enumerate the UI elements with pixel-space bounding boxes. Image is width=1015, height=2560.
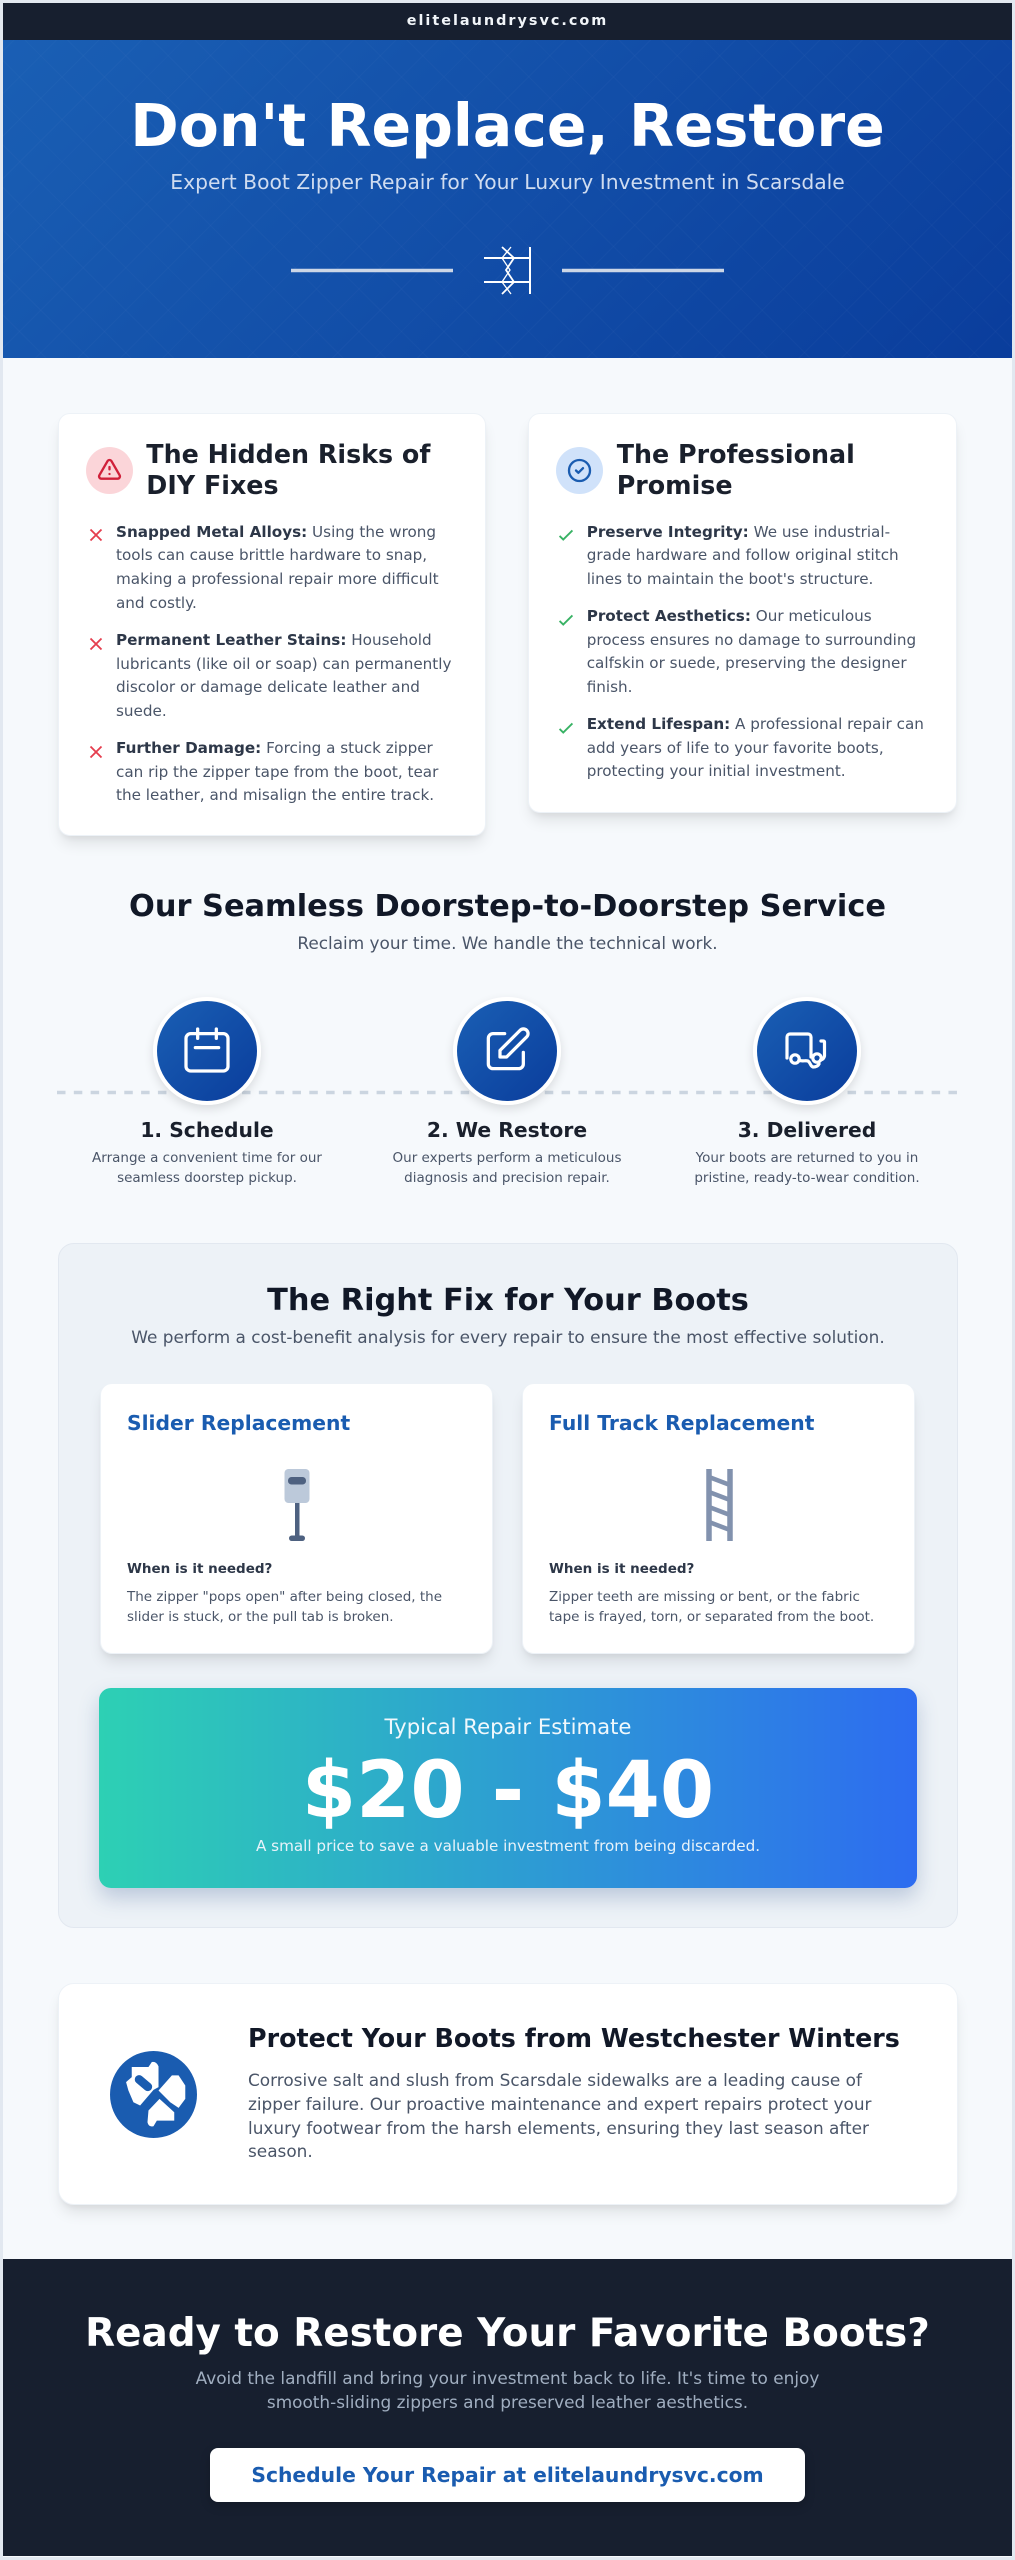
- when needed description: tape is frayed, torn, or separated from the boot.: [549, 1608, 874, 1624]
- risk text: can rip the zipper tape from the boot, tear: [116, 763, 438, 781]
- benefit text: add years of life to your favorite boots,: [587, 739, 884, 757]
- main title: Don't Replace, Restore: [130, 92, 885, 160]
- panel: the right fix for your boots: [58, 1243, 958, 1928]
- benefit text: process ensures no damage to surrounding: [587, 631, 916, 649]
- step icon: truck: [753, 997, 861, 1105]
- step description: Our experts perform a meticulous: [393, 1150, 621, 1166]
- when needed description: slider is stuck, or the pull tab is broken.: [127, 1608, 394, 1624]
- step icon: edit: [453, 997, 561, 1105]
- step title: 1. Schedule: [140, 1118, 274, 1142]
- step title: 3. Delivered: [738, 1118, 876, 1142]
- panel: the professional promise: [528, 413, 957, 813]
- benefit text: Preserve Integrity: We use industrial-: [587, 523, 890, 541]
- card title: Full Track Replacement: [549, 1411, 814, 1435]
- risk text: Further Damage: Forcing a stuck zipper: [116, 739, 433, 757]
- icon: zipper track: [706, 1469, 733, 1541]
- risk text: [116, 631, 451, 720]
- process dashed connector: [57, 1090, 957, 1094]
- heading: The Professional: [617, 439, 855, 469]
- section subtitle: We perform a cost-benefit analysis for every repair to ensure the most effective solution.: [131, 1327, 885, 1347]
- step description: Arrange a convenient time for our: [92, 1150, 322, 1166]
- risk: snapped metal alloys: [90, 523, 439, 612]
- step description: pristine, ready-to-wear condition.: [694, 1170, 920, 1186]
- when needed description: [126, 1588, 442, 1624]
- benefit text: [587, 715, 924, 780]
- risk text: Permanent Leather Stains: Household: [116, 631, 432, 649]
- benefit text: [587, 607, 916, 696]
- icon: check: [559, 614, 573, 626]
- footer heading: Ready to Restore Your Favorite Boots?: [85, 2310, 930, 2356]
- risk text: making a professional repair more difficult: [116, 570, 439, 588]
- icon: zipper slider: [284, 1469, 310, 1541]
- step description: seamless doorstep pickup.: [117, 1170, 297, 1186]
- footer text: Avoid the landfill and bring your investment back to life. It's time to enjoy: [196, 2368, 819, 2388]
- benefit text: calfskin or suede, preserving the designer: [587, 654, 907, 672]
- step description: [694, 1150, 920, 1186]
- footer text: smooth-sliding zippers and preserved leather aesthetics.: [267, 2392, 748, 2412]
- button: [210, 2448, 805, 2502]
- when needed label: When is it needed?: [549, 1560, 694, 1576]
- risk: permanent leather stains: [90, 631, 451, 720]
- step description: diagnosis and precision repair.: [404, 1170, 610, 1186]
- step description: [393, 1150, 621, 1186]
- benefit: protect aesthetics: [559, 607, 916, 696]
- step title: 2. We Restore: [427, 1118, 587, 1142]
- when needed label: When is it needed?: [127, 1560, 272, 1576]
- when needed description: [549, 1588, 874, 1624]
- zipper divider icon: [291, 246, 724, 295]
- heading: Protect Your Boots from Westchester Winters: [248, 2023, 900, 2053]
- top bar: [3, 3, 1012, 40]
- price: $20 - $40: [302, 1746, 714, 1836]
- benefit text: Extend Lifespan: A professional repair can: [587, 715, 924, 733]
- icon: check: [559, 722, 573, 734]
- heading: [616, 439, 855, 500]
- step description: Your boots are returned to you in: [696, 1150, 918, 1166]
- section subtitle: doorstep service: Reclaim your time. We handle the technical work.: [297, 933, 718, 953]
- benefit text: [587, 523, 899, 588]
- subtitle: Expert Boot Zipper Repair for Your Luxury Investment in Scarsdale: [170, 170, 845, 194]
- benefit text: finish.: [587, 678, 632, 696]
- body text: zipper failure. Our proactive maintenance and expert repairs protect your: [248, 2094, 872, 2114]
- body text: season.: [248, 2141, 313, 2161]
- estimate note: A small price to save a valuable investment from being discarded.: [256, 1837, 760, 1855]
- footer call to action: [3, 2259, 1012, 2556]
- risk text: [116, 739, 438, 804]
- step 1: schedule: [92, 997, 322, 1186]
- website name: elitelaundrysvc.com: [407, 13, 608, 29]
- panel: the hidden risks of DIY fixes: [58, 413, 486, 836]
- when needed description: Zipper teeth are missing or bent, or the fabric: [549, 1588, 860, 1604]
- button label: Schedule Your Repair at elitelaundrysvc.com: [251, 2463, 764, 2487]
- step 2: we restore: [393, 997, 621, 1186]
- body text: [248, 2070, 872, 2161]
- heading: Promise: [617, 470, 733, 500]
- risk text: suede.: [116, 702, 167, 720]
- benefit text: Protect Aesthetics: Our meticulous: [587, 607, 872, 625]
- when needed description: The zipper "pops open" after being closed, the: [127, 1588, 442, 1604]
- card title: Slider Replacement: [127, 1411, 350, 1435]
- heading: [146, 439, 431, 500]
- step icon: calendar: [153, 997, 261, 1105]
- heading: The Hidden Risks of: [146, 439, 430, 469]
- benefit text: lines to maintain the boot's structure.: [587, 570, 873, 588]
- risk text: discolor or damage delicate leather and: [116, 678, 420, 696]
- section heading: doorstep service: Our Seamless Doorstep-to-Doorstep Service: [129, 889, 886, 924]
- panel: westchester winters: [58, 1983, 958, 2205]
- risk text: tools can cause brittle hardware to snap,: [116, 546, 427, 564]
- icon: cross: [90, 638, 102, 650]
- estimate label: Typical Repair Estimate: [385, 1714, 631, 1739]
- heading: DIY Fixes: [146, 470, 279, 500]
- icon: cross: [90, 746, 102, 758]
- body text: luxury footwear from the harsh elements, ensuring they last season after: [248, 2118, 869, 2138]
- risk: further damage: [90, 739, 438, 804]
- card: slider replacement: [100, 1383, 493, 1654]
- card: full track replacement: [522, 1383, 915, 1654]
- icon: warning: [86, 447, 133, 494]
- benefit text: protecting your initial investment.: [587, 762, 846, 780]
- icon: check badge: [556, 447, 603, 494]
- risk text: the leather, and misalign the entire track.: [116, 786, 434, 804]
- callout: typical repair estimate: [99, 1688, 917, 1888]
- benefit: extend lifespan: [559, 715, 924, 780]
- benefit text: grade hardware and follow original stitch: [587, 546, 899, 564]
- icon: check: [559, 530, 573, 541]
- risk text: Snapped Metal Alloys: Using the wrong: [116, 523, 436, 541]
- body text: Corrosive salt and slush from Scarsdale sidewalks are a leading cause of: [248, 2070, 862, 2090]
- risk text: lubricants (like oil or soap) can permanently: [116, 655, 451, 673]
- footer text: [196, 2368, 819, 2412]
- step description: [92, 1150, 322, 1186]
- section heading: The Right Fix for Your Boots: [267, 1282, 749, 1318]
- benefit: preserve integrity: [559, 523, 899, 588]
- risk text: and costly.: [116, 594, 197, 612]
- risk text: [116, 523, 439, 612]
- icon: winter protection: [110, 2051, 197, 2138]
- step 3: delivered: [694, 997, 920, 1186]
- icon: cross: [90, 528, 102, 542]
- hero banner: [3, 40, 1012, 358]
